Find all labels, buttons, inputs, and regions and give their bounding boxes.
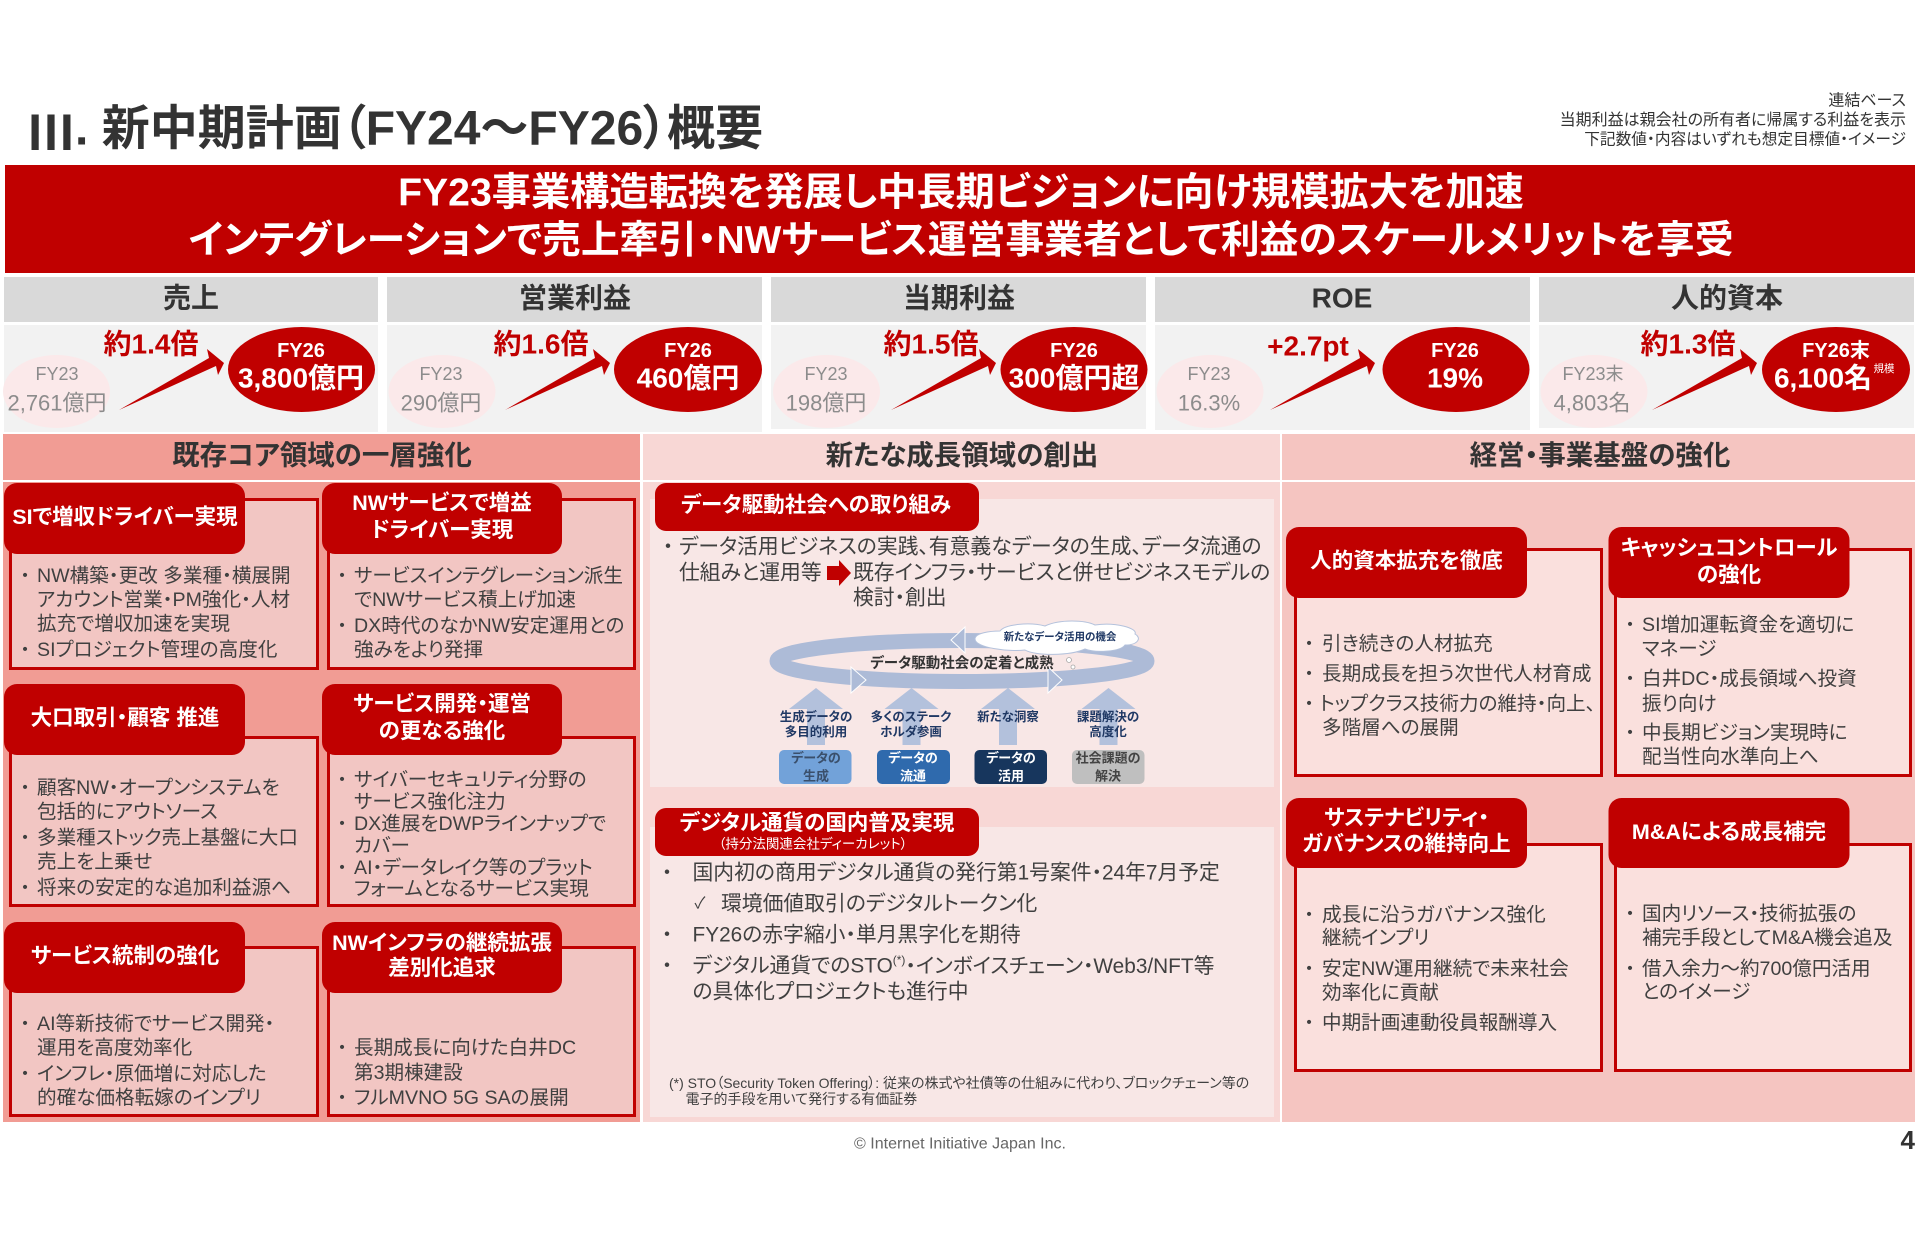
card: large deals and customers: 顧客NW・オープンシステムを — [37, 777, 280, 799]
card: M&A: ・ — [1625, 903, 1635, 925]
card: service development and operation: フォームとなるサービス実現 — [354, 878, 589, 900]
card: service governance: ・ — [20, 1063, 30, 1085]
card: large deals and customers: 包括的にアウトソース — [37, 801, 218, 823]
panel: core business — [3, 434, 640, 1122]
footnote — [669, 1075, 1249, 1107]
card: NW service profit driver: ドライバー実現 — [371, 518, 514, 542]
KPI panel: net income: 300億円超 — [1009, 362, 1139, 394]
panel background: core business — [3, 482, 640, 1122]
card: digital currency: 国内初の商用デジタル通貨の発行第1号案件・24年7月予定 — [692, 862, 1220, 884]
card: sustainability and governance: サステナビリティ・ — [1324, 806, 1489, 830]
card: digital currency: ・ — [662, 862, 672, 884]
card: human capital expansion: 長期成長を担う次世代人材育成 — [1322, 663, 1592, 685]
card: NW service profit driver: DX時代のなかNW安定運用との — [354, 615, 624, 637]
KPI panel: human capital — [1539, 277, 1914, 428]
card: cash control: SI増加運転資金を適切に — [1642, 614, 1854, 636]
footnote: 電子的手段を用いて発行する有価証券 — [686, 1091, 917, 1107]
KPI panel: operating profit: 営業利益 — [519, 282, 631, 314]
card: sustainability and governance: ガバナンスの維持向上 — [1302, 832, 1511, 856]
card: large deals and customers — [4, 684, 318, 906]
card: M&A: M&Aによる成長補完 — [1632, 820, 1826, 844]
card: digital currency: デジタル通貨でのSTO — [692, 954, 893, 978]
diagram: data-driven society cycle — [777, 621, 1147, 784]
KPI panel: operating profit — [387, 277, 762, 432]
card: digital currency — [650, 808, 1274, 1117]
card: cash control: 振り向け — [1642, 693, 1717, 715]
card: M&A — [1608, 798, 1910, 1070]
card: cash control: ・ — [1625, 668, 1635, 690]
card: human capital expansion: ・ — [1304, 633, 1314, 655]
card: digital currency: の具体化プロジェクトも進行中 — [692, 980, 968, 1004]
card: SI revenue driver: ・ — [20, 565, 30, 587]
diagram: data-driven society cycle: データの — [986, 750, 1036, 766]
card: cash control: ・ — [1625, 722, 1635, 744]
card: human capital expansion: トップクラス技術力の維持・向上、 — [1320, 693, 1595, 715]
card: service development and operation: カバー — [354, 835, 410, 857]
card: service development and operation: ・ — [337, 813, 347, 835]
card: data-driven society: データ活用ビジネスの実践、有意義なデータの生成、データ流通の — [679, 536, 1262, 558]
card: NW infrastructure expansion: ・ — [337, 1037, 347, 1059]
card: sustainability and governance: 効率化に貢献 — [1322, 982, 1439, 1004]
card: NW infrastructure expansion — [322, 922, 634, 1116]
KPI panel: ROE: +2.7pt — [1267, 330, 1349, 362]
KPI panel: ROE: ROE — [1312, 282, 1372, 314]
card: large deals and customers: ・ — [20, 877, 30, 899]
diagram: data-driven society cycle: 高度化 — [1089, 724, 1127, 739]
KPI panel: operating profit: 460億円 — [637, 362, 739, 394]
KPI panel: ROE: 19% — [1427, 362, 1483, 394]
icon: cloud — [975, 621, 1138, 654]
card: service governance: 的確な価格転嫁のインプリ — [37, 1087, 261, 1109]
card: M&A: ・ — [1625, 958, 1635, 980]
KPI panel: human capital: 約1.3倍 — [1641, 328, 1735, 360]
card: service governance: インフレ・原価増に対応した — [37, 1063, 267, 1085]
card: sustainability and governance: 成長に沿うガバナンス強化 — [1322, 904, 1546, 926]
card: SI revenue driver: SIプロジェクト管理の高度化 — [37, 639, 277, 661]
diagram: data-driven society cycle: 流通 — [900, 768, 926, 784]
card: cash control: 中長期ビジョン実現時に — [1642, 722, 1848, 744]
diagram: data-driven society cycle: 多目的利用 — [785, 724, 847, 739]
KPI panel: operating profit: 約1.6倍 — [494, 328, 588, 360]
KPI panel: net income: 198億円 — [786, 390, 866, 416]
KPI panel: net income: 当期利益 — [903, 282, 1015, 314]
KPI panel: net income: FY26 — [1050, 340, 1098, 362]
up arrows — [789, 688, 1136, 745]
card: sustainability and governance: ・ — [1304, 1012, 1314, 1034]
card: sustainability and governance: 継続インプリ — [1322, 927, 1429, 949]
panel: new growth areas — [643, 434, 1280, 1122]
heading: new growth areas: 新たな成長領域の創出 — [826, 440, 1098, 470]
card: cash control — [1608, 527, 1910, 776]
card: large deals and customers: 将来の安定的な追加利益源へ — [37, 877, 291, 899]
card: digital currency: ✓ — [695, 896, 706, 912]
panel background: new growth areas — [643, 482, 1280, 1122]
banner: インテグレーションで売上牽引・NWサービス運営事業者として利益のスケールメリットを享受 — [188, 219, 1734, 262]
heading: core business: 既存コア領域の一層強化 — [172, 440, 472, 470]
stage boxes — [779, 750, 852, 784]
KPI panel: ROE: FY23 — [1187, 364, 1231, 384]
card: service development and operation: サービス強化注力 — [354, 791, 506, 813]
card: digital currency: ・ — [662, 954, 672, 978]
card: M&A: とのイメージ — [1642, 981, 1750, 1003]
card: data-driven society: 検討・創出 — [853, 586, 947, 610]
card: human capital expansion: ・ — [1304, 693, 1314, 715]
diagram: data-driven society cycle: 新たな洞察 — [977, 709, 1039, 724]
KPI panel: sales: FY23 — [35, 364, 79, 384]
card: cash control: ・ — [1625, 614, 1635, 636]
banner — [5, 165, 1915, 273]
page number: 4 — [1901, 1125, 1916, 1155]
card: sustainability and governance: 中期計画連動役員報酬導入 — [1322, 1012, 1557, 1034]
card: cash control: の強化 — [1697, 563, 1761, 587]
diagram: data-driven society cycle: 課題解決の — [1077, 709, 1139, 724]
card: sustainability and governance: ・ — [1304, 904, 1314, 926]
card: sustainability and governance: 安定NW運用継続で未来社会 — [1322, 958, 1569, 980]
card: NW infrastructure expansion: ・ — [337, 1087, 347, 1109]
card: NW service profit driver: サービスインテグレーション派生 — [354, 565, 623, 587]
heading: management foundation: 経営・事業基盤の強化 — [1470, 440, 1730, 470]
card: human capital expansion: ・ — [1304, 663, 1314, 685]
card: SI revenue driver — [4, 483, 318, 668]
card: data-driven society: 仕組みと運用等 — [679, 562, 822, 584]
card: service governance: ・ — [20, 1013, 30, 1035]
card: cash control: 配当性向水準向上へ — [1642, 746, 1819, 768]
footnote: (*) STO（Security Token Offering）: 従来の株式や社債等の仕組みに代わり、ブロックチェーン等の — [669, 1075, 1249, 1091]
KPI panel: operating profit: 290億円 — [401, 390, 481, 416]
heading: new growth areas — [643, 434, 1280, 480]
card: M&A: 補完手段としてM&A機会追及 — [1642, 927, 1893, 949]
card: service development and operation: サイバーセキュリティ分野の — [354, 769, 587, 791]
panel: management foundation — [1282, 434, 1915, 1122]
diagram: data-driven society cycle: 新たなデータ活用の機会 — [1004, 630, 1117, 643]
diagram: data-driven society cycle: 社会課題の — [1076, 750, 1141, 766]
card: NW service profit driver: ・ — [337, 565, 347, 587]
KPI panel: net income — [771, 277, 1148, 429]
card: M&A: 借入余力～約700億円活用 — [1642, 958, 1871, 980]
KPI panel: net income: 約1.5倍 — [884, 328, 978, 360]
card: service development and operation: ・ — [337, 769, 347, 791]
note: basis of figures: 下記数値・内容はいずれも想定目標値・イメージ — [1584, 130, 1906, 148]
KPI panel: ROE — [1155, 277, 1530, 430]
card: sustainability and governance — [1286, 798, 1602, 1070]
card: NW service profit driver: ・ — [337, 615, 347, 637]
card: service development and operation: サービス開発・運営 — [353, 692, 531, 716]
banner: FY23事業構造転換を発展し中長期ビジョンに向け規模拡大を加速 — [398, 172, 1524, 214]
card: SI revenue driver: 拡充で増収加速を実現 — [37, 613, 230, 635]
card: service development and operation: DX進展をDWPラインナップで — [354, 813, 606, 835]
KPI panel: operating profit: FY23 — [419, 364, 463, 384]
diagram: data-driven society cycle: 解決 — [1095, 768, 1121, 784]
card: NW service profit driver: 強みをより発揮 — [354, 639, 483, 661]
card: NW infrastructure expansion: 第3期棟建設 — [354, 1062, 463, 1084]
KPI panel: sales: 売上 — [163, 282, 219, 314]
card: SI revenue driver: アカウント営業・PM強化・人材 — [37, 589, 290, 611]
card: SI revenue driver: SIで増収ドライバー実現 — [12, 505, 238, 529]
card: data-driven society — [650, 483, 1274, 787]
note: basis of figures: 当期利益は親会社の所有者に帰属する利益を表示 — [1560, 111, 1906, 129]
footer copyright: © Internet Initiative Japan Inc. — [854, 1136, 1066, 1152]
card: cash control: 白井DC・成長領域へ投資 — [1642, 668, 1857, 690]
card: NW service profit driver: でNWサービス積上げ加速 — [354, 589, 576, 611]
card: digital currency: デジタル通貨の国内普及実現 — [680, 810, 955, 835]
card: service governance: AI等新技術でサービス開発・ — [37, 1013, 274, 1035]
KPI panel: human capital: FY23末 — [1562, 364, 1624, 384]
card: digital currency: 環境価値取引のデジタルトークン化 — [721, 892, 1037, 916]
card: human capital expansion: 多階層への展開 — [1322, 717, 1459, 739]
KPI panel: sales: FY26 — [277, 340, 325, 362]
card: cash control: マネージ — [1642, 638, 1716, 660]
diagram: data-driven society cycle: 活用 — [998, 768, 1024, 784]
card: service development and operation: AI・データレイク等のプラット — [354, 857, 593, 879]
KPI panel: human capital: 4,803名 — [1553, 390, 1631, 416]
panel background: management foundation — [1282, 482, 1915, 1122]
KPI panel: human capital: FY26末 — [1802, 339, 1870, 362]
KPI panel: human capital: 人的資本 — [1671, 282, 1783, 314]
heading: management foundation — [1282, 434, 1915, 480]
KPI panel: human capital: 6,100名 — [1774, 362, 1872, 394]
card: large deals and customers: ・ — [20, 827, 30, 849]
card: sustainability and governance: ・ — [1304, 958, 1314, 980]
card: service governance: 運用を高度効率化 — [37, 1037, 192, 1059]
card: NW service profit driver — [322, 483, 634, 668]
card: SI revenue driver: ・ — [20, 639, 30, 661]
card: data-driven society: 既存インフラ・サービスと併せビジネスモデルの — [853, 562, 1270, 584]
card: digital currency: FY26の赤字縮小・単月黒字化を期待 — [692, 924, 1021, 946]
note: basis of figures: 連結ベース — [1828, 92, 1906, 110]
KPI panel: net income: FY23 — [804, 364, 848, 384]
card: service governance: サービス統制の強化 — [31, 944, 219, 968]
card: cash control: キャッシュコントロール — [1621, 536, 1837, 560]
card: digital currency: （持分法関連会社ディーカレット） — [719, 836, 907, 852]
card: data-driven society: ・ — [663, 536, 673, 558]
KPI panel: sales — [3, 277, 378, 432]
card: data-driven society: データ駆動社会への取り組み — [681, 492, 951, 517]
note: basis of figures — [1560, 92, 1906, 148]
card: NW infrastructure expansion: 長期成長に向けた白井DC — [354, 1037, 576, 1059]
diagram: data-driven society cycle: データの — [791, 750, 841, 766]
diagram: data-driven society cycle: 多くのステーク — [871, 709, 952, 724]
card: large deals and customers: 多業種ストック売上基盤に大口 — [37, 827, 298, 849]
card: service development and operation: ・ — [337, 857, 347, 879]
card: human capital expansion — [1286, 527, 1602, 776]
diagram: data-driven society cycle: ホルダ参画 — [880, 724, 942, 739]
card: human capital expansion: 引き続きの人材拡充 — [1322, 633, 1493, 655]
KPI panel: sales: 2,761億円 — [7, 390, 107, 416]
KPI panel: sales: 約1.4倍 — [104, 328, 198, 360]
diagram: data-driven society cycle: データの — [888, 750, 938, 766]
card: NW infrastructure expansion: フルMVNO 5G SAの展開 — [354, 1087, 569, 1109]
card: human capital expansion: 人的資本拡充を徹底 — [1310, 549, 1503, 573]
KPI panel: sales: 3,800億円 — [238, 362, 364, 394]
diagram: data-driven society cycle: 生成 — [803, 768, 829, 784]
card: large deals and customers: 大口取引・顧客 推進 — [31, 706, 219, 730]
KPI panel: ROE: FY26 — [1431, 340, 1479, 362]
card: service governance — [4, 922, 318, 1116]
card: digital currency: ・インボイスチェーン・Web3/NFT等 — [905, 954, 1214, 978]
KPI panel: ROE: 16.3% — [1178, 390, 1240, 416]
card: digital currency: (*) — [893, 953, 905, 967]
card: large deals and customers: ・ — [20, 777, 30, 799]
title: Ⅲ. 新中期計画（FY24～FY26）概要 — [27, 94, 763, 164]
KPI panel: human capital: 規模 — [1874, 363, 1895, 375]
card: NW service profit driver: NWサービスで増益 — [352, 491, 532, 515]
diagram: data-driven society cycle: 生成データの — [780, 709, 852, 724]
card: service development and operation — [322, 684, 634, 906]
heading: core business — [3, 434, 640, 480]
card: service development and operation: の更なる強化 — [379, 719, 505, 743]
card: digital currency: ・ — [662, 924, 672, 946]
icon: red arrow — [827, 560, 851, 586]
card: M&A: 国内リソース・技術拡張の — [1642, 903, 1856, 925]
card: NW infrastructure expansion: 差別化追求 — [388, 956, 496, 980]
diagram: data-driven society cycle: データ駆動社会の定着と成熟 — [870, 654, 1054, 672]
card: large deals and customers: 売上を上乗せ — [37, 851, 152, 873]
card: NW infrastructure expansion: NWインフラの継続拡張 — [332, 931, 552, 955]
KPI panel: operating profit: FY26 — [664, 340, 712, 362]
card: SI revenue driver: NW構築・更改 多業種・横展開 — [37, 565, 291, 587]
